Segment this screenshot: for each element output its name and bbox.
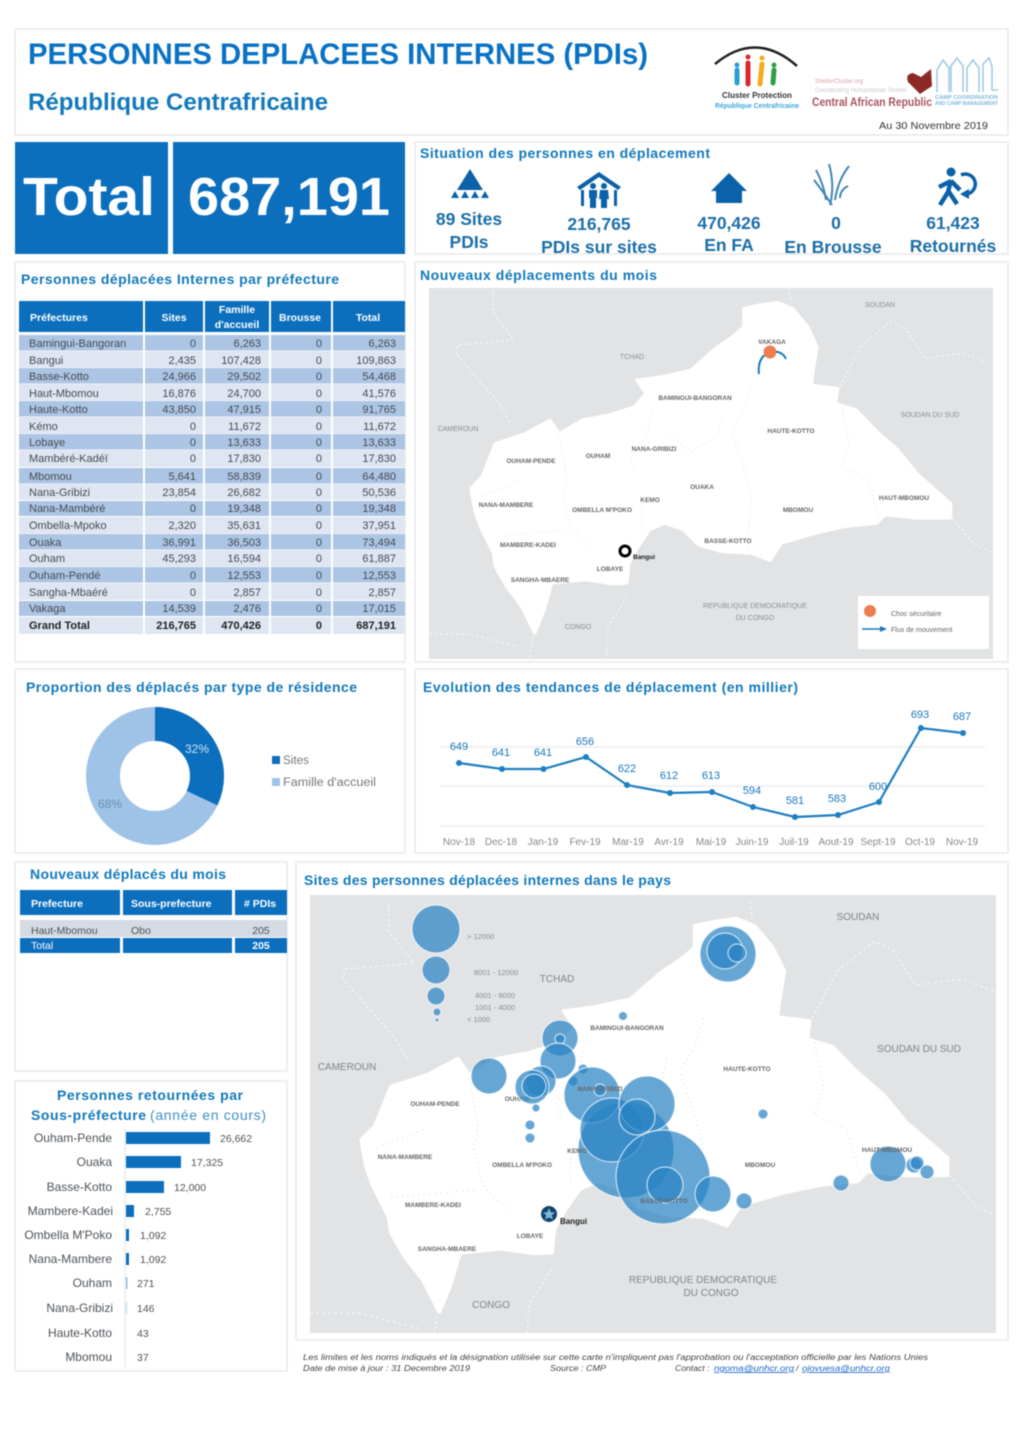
line chart: 594 <box>743 785 761 797</box>
logo: shelter cluster and CCCM: Central African Republic <box>812 95 932 109</box>
table column: famille d'accueil: 6,263 <box>233 338 261 350</box>
table names: Vakaga <box>29 603 66 615</box>
bubble-top labels <box>567 1086 912 1205</box>
table names: Mbomou <box>29 471 72 483</box>
map labels: TCHAD <box>620 354 644 361</box>
table names: Nana-Mambéré <box>29 503 105 515</box>
map labels: LOBAYE <box>597 566 624 573</box>
size legend: < 1000 <box>467 1015 490 1024</box>
footer note: Les limites et les noms indiqués et la désignation utilisée sur cette carte n'impliquent pas l'approbation ou l'acceptation officielle par les Nations Unies <box>303 1352 929 1362</box>
map labels: NANA-MAMBERE <box>378 1154 433 1161</box>
bar chart: Ouham <box>73 1276 112 1290</box>
table column: brousse: 0 <box>316 437 322 449</box>
donut legend: Sites <box>283 755 309 767</box>
table column: famille d'accueil: 11,672 <box>228 421 261 433</box>
logo: shelter cluster and CCCM <box>812 58 998 109</box>
table column: sites <box>156 338 196 632</box>
map labels: OUHAM-PENDE <box>410 1101 460 1108</box>
donut legend <box>272 755 376 789</box>
table column: brousse <box>316 338 322 632</box>
table column: total: 61,887 <box>362 553 396 565</box>
marker: shock location with flows <box>759 346 786 374</box>
footer note: Contact : <box>675 1363 710 1373</box>
map labels: SOUDAN DU SUD <box>877 1044 961 1055</box>
table names: Ouham-Pendé <box>29 570 101 582</box>
line chart: Mai-19 <box>696 837 727 848</box>
total label: Total <box>23 167 155 227</box>
table column: total: 687,191 <box>356 620 396 632</box>
table column: total: 91,765 <box>362 404 396 416</box>
map background <box>429 288 993 659</box>
table header: Préfectures <box>30 312 88 324</box>
table column: famille d'accueil: 2,476 <box>233 603 261 615</box>
table column: sites: 0 <box>190 587 196 599</box>
panel: total <box>15 142 405 254</box>
table header: Sites <box>161 312 187 324</box>
table names: Basse-Kotto <box>29 371 89 383</box>
table column: famille d'accueil: 58,839 <box>227 471 261 483</box>
map labels: OUHAM <box>505 1096 529 1103</box>
line chart: 612 <box>660 770 678 782</box>
map labels: SANGHA-MBAERE <box>418 1246 477 1253</box>
new displaced table: Haut-Mbomou <box>31 925 98 937</box>
line chart: 600 <box>869 781 887 793</box>
bar chart: Nana-Mambere <box>29 1252 112 1266</box>
new displaced table: 205 <box>252 940 270 952</box>
line chart: Mar-19 <box>612 837 644 848</box>
table column: total: 17,015 <box>362 603 396 615</box>
new displaced table: 205 <box>252 925 270 937</box>
heading: Personnes déplacées Internes par préfecture <box>21 271 339 287</box>
table column: brousse: 0 <box>316 537 322 549</box>
bubble-top labels: BASSE-KOTTO <box>640 1198 688 1205</box>
table column: brousse: 0 <box>316 520 322 532</box>
table column: sites: 0 <box>190 437 196 449</box>
bar chart: 1,092 <box>140 1254 166 1266</box>
map labels: BASSE-KOTTO <box>704 538 752 545</box>
table names: Lobaye <box>29 437 65 449</box>
table names: Sangha-Mbaéré <box>29 587 108 599</box>
table column: sites: 16,876 <box>162 388 196 400</box>
map labels: NANA-GRIBIZI <box>632 446 677 453</box>
donut legend: Famille d'accueil <box>283 777 376 789</box>
bar chart: 1,092 <box>140 1230 166 1242</box>
stat: brousse: En Brousse <box>784 237 882 257</box>
bar chart: 271 <box>137 1278 155 1290</box>
stat: PDIs sur sites: PDIs sur sites <box>541 237 657 257</box>
table names: Bamingui-Bangoran <box>29 338 126 350</box>
stat: brousse <box>784 213 882 257</box>
table column: brousse: 0 <box>316 471 322 483</box>
icon: house <box>711 173 747 203</box>
table column: famille d'accueil: 2,857 <box>233 587 261 599</box>
heading: Nouveaux déplacements du mois <box>420 267 657 283</box>
table column: sites: 45,293 <box>162 553 196 565</box>
table names: Ouaka <box>29 537 62 549</box>
line chart: Sept-19 <box>860 837 896 848</box>
map labels: MAMBERE-KADEI <box>500 542 556 549</box>
table names: Ouham <box>29 553 65 565</box>
bar chart: 37 <box>137 1352 149 1364</box>
table column: famille d'accueil: 16,594 <box>227 553 261 565</box>
table column: total: 13,633 <box>362 437 396 449</box>
line chart: 583 <box>828 793 846 805</box>
stat: sites: PDIs <box>450 232 489 252</box>
panel: new displaced table <box>15 862 287 1071</box>
table column: sites: 36,991 <box>162 537 196 549</box>
table column: famille d'accueil: 35,631 <box>227 520 261 532</box>
panel: sites map <box>296 862 1008 1342</box>
table column: sites: 0 <box>190 338 196 350</box>
map labels: TCHAD <box>540 974 574 985</box>
stat: famille d'accueil: 470,426 <box>697 213 761 233</box>
map labels: VAKAGA <box>758 339 786 346</box>
map labels: MAMBERE-KADEI <box>405 1202 461 1209</box>
footer note: / <box>795 1363 800 1373</box>
new displaced table: Total <box>31 940 53 952</box>
logo: shelter cluster and CCCM: ShelterCluster.org <box>815 79 863 85</box>
donut chart: 32% <box>185 742 209 756</box>
table column: sites: 24,966 <box>162 371 196 383</box>
table header: d'accueil <box>215 319 259 331</box>
table column: total: 12,553 <box>362 570 396 582</box>
table column: brousse: 0 <box>316 421 322 433</box>
map labels: OUHAM <box>586 453 610 460</box>
map legend: Choc sécuritaire <box>891 611 942 618</box>
table column: sites: 2,435 <box>168 355 196 367</box>
heading: (année en cours) <box>150 1107 266 1123</box>
bar chart: Mbomou <box>65 1350 112 1364</box>
map labels: CONGO <box>472 1300 510 1311</box>
line chart: Fev-19 <box>569 837 601 848</box>
map labels: SOUDAN <box>865 302 895 309</box>
table names: Ombella-Mpoko <box>29 520 107 532</box>
line chart: 687 <box>953 711 971 723</box>
line chart: Dec-18 <box>485 837 518 848</box>
line chart: 693 <box>911 709 929 721</box>
footer note <box>303 1352 929 1373</box>
logo: shelter cluster and CCCM: AND CAMP MANAGEMENT <box>935 101 998 107</box>
bar chart: 43 <box>137 1328 149 1340</box>
table column: brousse: 0 <box>316 355 322 367</box>
table column: sites: 5,641 <box>168 471 196 483</box>
map: country shape <box>310 902 998 1342</box>
donut chart <box>98 724 209 828</box>
map labels: CAMEROUN <box>438 426 478 433</box>
bar chart: 17,325 <box>191 1157 223 1169</box>
heading: Proportion des déplacés par type de résidence <box>26 679 357 695</box>
bar chart: Haute-Kotto <box>48 1326 112 1340</box>
size legend <box>412 905 518 1024</box>
table names: Mambéré-Kadéï <box>29 453 109 465</box>
bar chart: 146 <box>137 1303 155 1315</box>
new displaced table: # PDIs <box>244 898 276 910</box>
marker: Bangui <box>620 546 655 561</box>
marker: Bangui: Bangui <box>633 554 655 561</box>
total value: 687,191 <box>188 167 390 227</box>
table column: sites: 2,320 <box>168 520 196 532</box>
line chart <box>440 709 985 848</box>
table column: famille d'accueil: 47,915 <box>227 404 261 416</box>
table names: Haut-Mbomou <box>29 388 99 400</box>
footer note: Date de mise à jour : 31 Decembre 2019 <box>303 1363 470 1373</box>
table column: brousse: 0 <box>316 570 322 582</box>
bar chart: Basse-Kotto <box>47 1180 112 1194</box>
panel: situation <box>415 142 1008 257</box>
map labels: NANA-MAMBERE <box>479 502 534 509</box>
map labels: SOUDAN DU SUD <box>901 412 959 419</box>
table column: total: 2,857 <box>368 587 396 599</box>
table column: sites: 0 <box>190 503 196 515</box>
map labels: REPUBLIQUE DEMOCRATIQUE <box>629 1275 777 1286</box>
table column: brousse: 0 <box>316 388 322 400</box>
table header: Total <box>356 312 380 324</box>
table column: brousse: 0 <box>316 553 322 565</box>
bubble-top labels: HAUT-MBOMOU <box>862 1147 912 1154</box>
map labels: OUAKA <box>690 484 714 491</box>
subtitle: République Centrafricaine <box>28 89 328 116</box>
map labels: MBOMOU <box>745 1162 775 1169</box>
table column: famille d'accueil: 36,503 <box>227 537 261 549</box>
table header: Famille <box>219 304 255 316</box>
table column: brousse: 0 <box>316 371 322 383</box>
map labels: BAMINGUI-BANGORAN <box>658 395 732 402</box>
table column: total: 54,468 <box>362 371 396 383</box>
table column: brousse: 0 <box>316 620 322 632</box>
bar chart: 26,662 <box>220 1133 252 1145</box>
table column: brousse: 0 <box>316 587 322 599</box>
bar chart: Nana-Gribizi <box>46 1301 113 1315</box>
bubble-top labels: KEMO <box>567 1148 587 1155</box>
table column: famille d'accueil: 470,426 <box>221 620 261 632</box>
table header <box>19 301 405 332</box>
line chart: 649 <box>450 741 468 753</box>
date: Au 30 Novembre 2019 <box>879 120 988 132</box>
table column: total: 11,672 <box>363 421 396 433</box>
title: PERSONNES DEPLACEES INTERNES (PDIs) <box>28 38 648 71</box>
footer note: Source : CMP <box>550 1363 606 1373</box>
table row backgrounds <box>19 335 405 634</box>
panel: donut proportion <box>15 669 405 853</box>
stat: retournes <box>910 213 997 256</box>
map legend <box>858 596 989 649</box>
bar chart: 2,755 <box>145 1206 171 1218</box>
map labels: DU CONGO <box>684 1288 739 1299</box>
map labels: OUHAM-PENDE <box>506 458 556 465</box>
new displaced table: Sous-prefecture <box>131 898 212 910</box>
heading <box>31 1087 266 1123</box>
line chart: Juil-19 <box>779 837 809 848</box>
map labels: HAUTE-KOTTO <box>723 1066 771 1073</box>
line chart: Aout-19 <box>818 837 854 848</box>
heading: Sous-préfecture <box>31 1107 146 1123</box>
table column: brousse: 0 <box>316 404 322 416</box>
table column: famille d'accueil: 26,682 <box>227 487 261 499</box>
size legend: 8001 - 12000 <box>474 968 518 977</box>
map background <box>310 895 996 1333</box>
bar chart: Ombella M'Poko <box>24 1228 112 1242</box>
icon: returnee walking <box>939 168 975 205</box>
map labels: REPUBLIQUE DEMOCRATIQUE <box>703 603 807 610</box>
stat: famille d'accueil <box>697 213 761 255</box>
table column: total: 109,863 <box>356 355 396 367</box>
table column: brousse: 0 <box>316 338 322 350</box>
table column: total: 50,536 <box>362 487 396 499</box>
line chart: 641 <box>492 747 510 759</box>
marker: Bangui: Bangui <box>560 1217 587 1226</box>
table column: sites: 23,854 <box>162 487 196 499</box>
line chart: Juin-19 <box>736 837 769 848</box>
table column: sites: 43,850 <box>162 404 196 416</box>
map labels: CONGO <box>565 624 592 631</box>
marker: Bangui <box>541 1206 587 1226</box>
map legend: Flux de mouvement <box>891 627 953 634</box>
map labels <box>438 302 959 631</box>
table column: brousse: 0 <box>316 487 322 499</box>
table column: sites: 14,539 <box>162 603 196 615</box>
table column: famille d'accueil: 17,830 <box>227 453 261 465</box>
map labels: OMBELLA M'POKO <box>572 507 632 514</box>
footer note: ngoma@unhcr.org <box>714 1363 794 1373</box>
map labels: CAMEROUN <box>318 1062 376 1073</box>
stat: retournes: Retournés <box>910 236 997 256</box>
heading: Nouveaux déplacés du mois <box>30 866 226 882</box>
map labels: DU CONGO <box>736 615 775 622</box>
stat: brousse: 0 <box>831 213 841 233</box>
stat: PDIs sur sites <box>541 214 657 257</box>
table header: Brousse <box>279 312 321 324</box>
table column: famille d'accueil: 12,553 <box>227 570 261 582</box>
table column: brousse: 0 <box>316 603 322 615</box>
map labels: HAUT-MBOMOU <box>879 495 929 502</box>
heading: Situation des personnes en déplacement <box>420 145 710 161</box>
table column: total: 6,263 <box>368 338 396 350</box>
bar chart: Ouaka <box>77 1155 112 1169</box>
new displaced table: Prefecture <box>31 898 83 910</box>
bar chart: 12,000 <box>174 1182 206 1194</box>
table names: Haute-Kotto <box>29 404 88 416</box>
table column: sites: 0 <box>190 570 196 582</box>
table column: famille d'accueil: 107,428 <box>221 355 261 367</box>
map labels: SOUDAN <box>837 912 879 923</box>
table column: brousse: 0 <box>316 503 322 515</box>
stat: retournes: 61,423 <box>926 213 980 233</box>
line chart: Avr-19 <box>654 837 684 848</box>
panel: new displacements map <box>415 262 1008 662</box>
icon: people in house <box>577 172 621 208</box>
footer note: ojovuesa@unhcr.org <box>802 1363 890 1373</box>
map labels <box>318 912 961 1311</box>
table names <box>29 338 126 632</box>
stat: PDIs sur sites: 216,765 <box>567 214 631 234</box>
icon: tents <box>451 169 489 198</box>
new displaced table <box>20 890 287 953</box>
stat: sites <box>436 209 502 252</box>
map: country shape <box>429 288 992 658</box>
table names: Grand Total <box>29 620 90 632</box>
heading: Personnes retournées par <box>57 1087 244 1103</box>
size legend: 1001 - 4000 <box>475 1003 515 1012</box>
table column: famille d'accueil: 19,348 <box>227 503 261 515</box>
table column: sites: 0 <box>190 421 196 433</box>
line chart: Nov-18 <box>443 837 476 848</box>
line chart: Nov-19 <box>946 837 979 848</box>
heading: Sites des personnes déplacées internes dans le pays <box>304 872 671 888</box>
table names: Bangui <box>29 355 63 367</box>
bubble-top labels: NANA-GRIBIZI <box>578 1086 623 1093</box>
map labels: MBOMOU <box>783 507 813 514</box>
map labels: KEMO <box>640 497 660 504</box>
table column: famille d'accueil <box>221 338 261 632</box>
table column: total <box>356 338 396 632</box>
map labels: OMBELLA M'POKO <box>492 1162 552 1169</box>
table column: total: 37,951 <box>362 520 396 532</box>
logo: shelter cluster and CCCM: Coordinating Humanitarian Shelter <box>815 88 907 94</box>
line chart: Jan-19 <box>528 837 559 848</box>
panel: header <box>15 29 1008 135</box>
line chart: 656 <box>576 736 594 748</box>
table column: sites: 0 <box>190 453 196 465</box>
line chart: 581 <box>786 795 804 807</box>
icon: bush <box>814 164 849 205</box>
new displaced table: Obo <box>131 925 151 937</box>
table column: total: 41,576 <box>362 388 396 400</box>
bar chart: Mambere-Kadei <box>28 1204 113 1218</box>
line chart: 622 <box>618 763 636 775</box>
map labels: SANGHA-MBAERE <box>511 577 570 584</box>
line chart: Oct-19 <box>905 837 935 848</box>
stat: famille d'accueil: En FA <box>704 235 754 255</box>
panel: table by prefecture <box>15 262 405 662</box>
stat: sites: 89 Sites <box>436 209 502 229</box>
table column: total: 19,348 <box>362 503 396 515</box>
heading: Evolution des tendances de déplacement (en millier) <box>423 679 798 695</box>
table column: total: 17,830 <box>362 453 396 465</box>
table column: total: 73,494 <box>362 537 396 549</box>
map labels: HAUTE-KOTTO <box>767 428 815 435</box>
line chart: 613 <box>702 770 720 782</box>
line chart: 641 <box>534 747 552 759</box>
table column: famille d'accueil: 24,700 <box>227 388 261 400</box>
panel: returned persons <box>15 1081 287 1371</box>
logo: cluster protection: Cluster Protection <box>722 90 792 100</box>
map labels: BAMINGUI-BANGORAN <box>590 1025 664 1032</box>
table column: total: 64,480 <box>362 471 396 483</box>
table names: Kémo <box>29 421 58 433</box>
table column: famille d'accueil: 29,502 <box>227 371 261 383</box>
size legend: > 12000 <box>467 932 494 941</box>
panel: trend line chart <box>415 669 1008 853</box>
table column: sites: 216,765 <box>156 620 196 632</box>
donut chart: 68% <box>98 797 122 811</box>
logo: shelter cluster and CCCM: CAMP COORDINATION <box>935 95 998 101</box>
map labels: LOBAYE <box>517 1233 544 1240</box>
table names: Nana-Gribizi <box>29 487 90 499</box>
logo: cluster protection: République Centrafricaine <box>715 101 799 110</box>
table column: famille d'accueil: 13,633 <box>227 437 261 449</box>
proportional bubbles <box>471 926 934 1224</box>
bar chart <box>24 1127 252 1367</box>
bar chart: Ouham-Pende <box>34 1131 112 1145</box>
table column: brousse: 0 <box>316 453 322 465</box>
logo: cluster protection <box>715 47 799 110</box>
size legend: 4001 - 8000 <box>475 991 515 1000</box>
